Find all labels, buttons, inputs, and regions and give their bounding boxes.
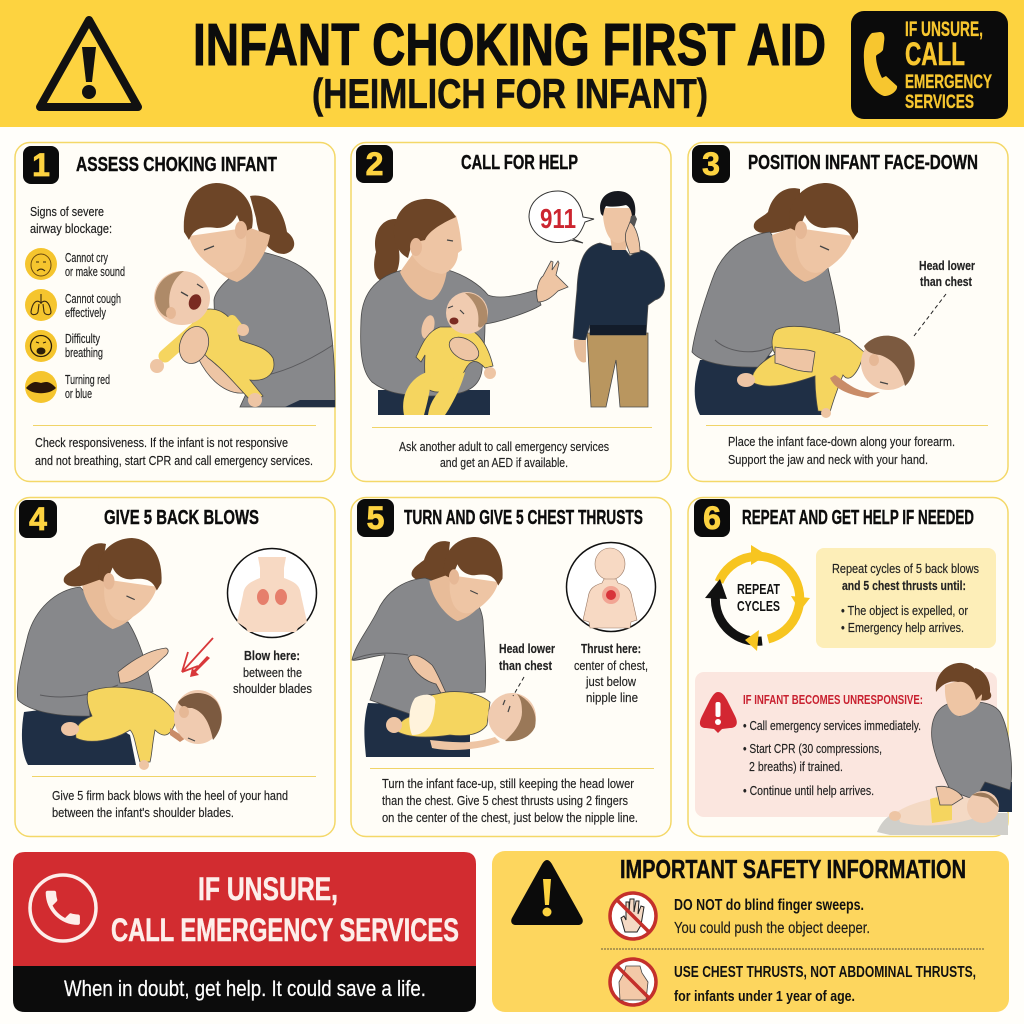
signs of severe airway blockage list: Cannot cough [65,292,121,306]
panel: step 6 repeat [688,498,1012,836]
label: thrust here: center of chest, [574,659,648,673]
caption: and get an AED if available. [440,456,568,470]
label: head lower than chest [914,259,975,336]
icon: phone handset [864,32,897,96]
caption: between the infant's shoulder blades. [52,806,234,820]
diagram: repeat cycle arrows [705,545,810,651]
icon: lips [25,371,57,403]
panel: step 1 assess [15,142,335,482]
title: INFANT CHOKING FIRST AID [193,12,826,78]
caption [35,435,313,468]
callout: if infant becomes unresponsive: 2 breaths) if trained. [749,760,843,774]
speech bubble: 911 [529,191,594,243]
icon: black warning triangle [511,860,583,925]
panel: important safety information: for infants under 1 year of age. [674,988,855,1005]
icon: no abdominal thrusts [610,959,656,1005]
callout: call emergency services: SERVICES [905,92,974,113]
icon: warning triangle [40,20,138,107]
illustration: mother performing CPR on infant [877,663,1012,835]
banner: if unsure call emergency services [13,852,476,1012]
signs of severe airway blockage list: airway blockage: [30,221,112,236]
label: blow here: Blow here: [244,649,300,663]
step number 1: 1 [32,147,50,183]
callout: call emergency services: EMERGENCY [905,72,992,93]
illustration: mother holding infant, signalling [361,199,568,415]
callout: repeat cycles until: Repeat cycles of 5 back blows [832,562,979,576]
icon: lungs [25,289,57,321]
callout: call emergency services: IF UNSURE, [905,18,983,41]
signs of severe airway blockage list: Cannot cry [65,251,109,265]
label: thrust here: Thrust here: [581,642,641,656]
banner: if unsure call emergency services: IF UNSURE, [198,871,338,907]
callout: call emergency services [851,11,1008,119]
callout: repeat cycles until: • Emergency help arrives. [841,621,964,635]
label: head lower than chest [499,642,555,696]
icon: open mouth face [25,330,57,362]
caption: Place the infant face-down along your forearm. [728,435,955,449]
label: head lower than chest: than chest [499,659,553,673]
illustration: mother holding infant [150,183,335,407]
callout: if infant becomes unresponsive: • Call emergency services immediately. [743,719,921,733]
label: thrust here: nipple line [586,691,638,705]
label: blow here [233,649,312,696]
step number 4 [19,500,57,538]
caption: Support the jaw and neck with your hand. [728,453,928,467]
banner: if unsure call emergency services: CALL EMERGENCY SERVICES [111,912,459,948]
panel: important safety information [492,851,1009,1012]
panel: step 3 position face-down [688,142,1008,482]
icon: no finger sweeps [610,893,656,939]
callout: repeat cycles until [816,548,996,648]
signs of severe airway blockage list: or blue [65,387,92,401]
label: thrust here [574,642,648,705]
caption [399,440,609,470]
icon: red motion arrows [182,638,213,677]
diagram: back with shoulder blades [228,548,316,638]
callout: repeat cycles until: • The object is expelled, or [841,604,968,618]
step number 4: 4 [29,501,47,537]
step number 6: 6 [703,500,721,536]
panel: important safety information: DO NOT do blind finger sweeps. [674,897,864,914]
signs of severe airway blockage list: Difficulty [65,332,101,346]
diagram: chest thrust point [566,542,656,632]
callout: repeat cycles until: and 5 chest thrusts until: [842,579,966,593]
panel: step 2 call for help [351,142,671,482]
panel: step 4 back blows [15,498,335,836]
panel: step 5 chest thrusts [351,498,671,836]
signs of severe airway blockage list: breathing [65,346,103,360]
caption [728,435,955,467]
illustration: mother giving chest thrusts [352,537,536,757]
step number 6 [694,499,730,537]
step number 2: 2 [366,146,383,182]
callout: call emergency services: CALL [905,36,965,72]
illustration: man on phone [573,191,665,407]
callout: if infant becomes unresponsive: • Continue until help arrives. [743,784,874,798]
step number 5: 5 [367,500,384,536]
signs of severe airway blockage list: Signs of severe [30,204,104,219]
caption: Turn the infant face-up, still keeping the head lower [382,777,634,791]
label: head lower than chest: than chest [920,275,973,289]
header banner [0,0,1024,127]
hand [537,261,568,302]
heading: CALL FOR HELP [461,152,578,174]
caption: Give 5 firm back blows with the heel of your hand [52,789,288,803]
step number 2 [356,145,393,183]
signs of severe airway blockage list: or make sound [65,265,125,279]
caption: Ask another adult to call emergency services [399,440,609,454]
callout: if infant becomes unresponsive: IF INFANT BECOMES UNRESPONSIVE: [743,692,923,707]
signs of severe airway blockage list: Turning red [65,373,110,387]
label: thrust here: just below [585,675,637,689]
step number 3 [692,145,730,183]
speech bubble: 911: 911 [540,203,576,234]
icon: baby face [25,248,57,280]
icon: phone in circle [30,875,96,941]
label: blow here: shoulder blades [233,682,312,696]
diagram: repeat cycle arrows: REPEAT [737,581,780,598]
signs of severe airway blockage list: effectively [65,306,107,320]
icon: red warning [700,692,737,733]
diagram: repeat cycle arrows: CYCLES [737,598,780,615]
step number 1 [23,146,59,184]
label: head lower than chest: Head lower [499,642,555,656]
hand raised [118,648,168,683]
step number 3: 3 [702,146,720,182]
illustration: mother positioning infant face-down [692,183,915,418]
callout: if infant becomes unresponsive [695,672,997,817]
heading: TURN AND GIVE 5 CHEST THRUSTS [404,507,643,529]
label: head lower than chest: Head lower [919,259,975,273]
caption: on the center of the chest, just below the nipple line. [382,811,638,825]
callout: if infant becomes unresponsive: • Start CPR (30 compressions, [743,742,882,756]
caption [382,777,638,825]
step number 5 [357,499,394,537]
illustration: mother giving back blows [17,538,222,770]
panel: important safety information: You could push the object deeper. [674,920,870,937]
caption: than the chest. Give 5 chest thrusts using 2 fingers [382,794,628,808]
heading: ASSESS CHOKING INFANT [76,154,277,176]
banner: if unsure call emergency services: When in doubt, get help. It could save a life. [64,976,426,1001]
subtitle: (HEIMLICH FOR INFANT) [312,70,708,117]
caption: and not breathing, start CPR and call emergency services. [35,453,313,468]
caption: Check responsiveness. If the infant is not responsive [35,435,288,450]
signs of severe airway blockage list [25,204,125,403]
caption [52,789,288,820]
heading: GIVE 5 BACK BLOWS [104,507,259,529]
label: blow here: between the [243,666,302,680]
